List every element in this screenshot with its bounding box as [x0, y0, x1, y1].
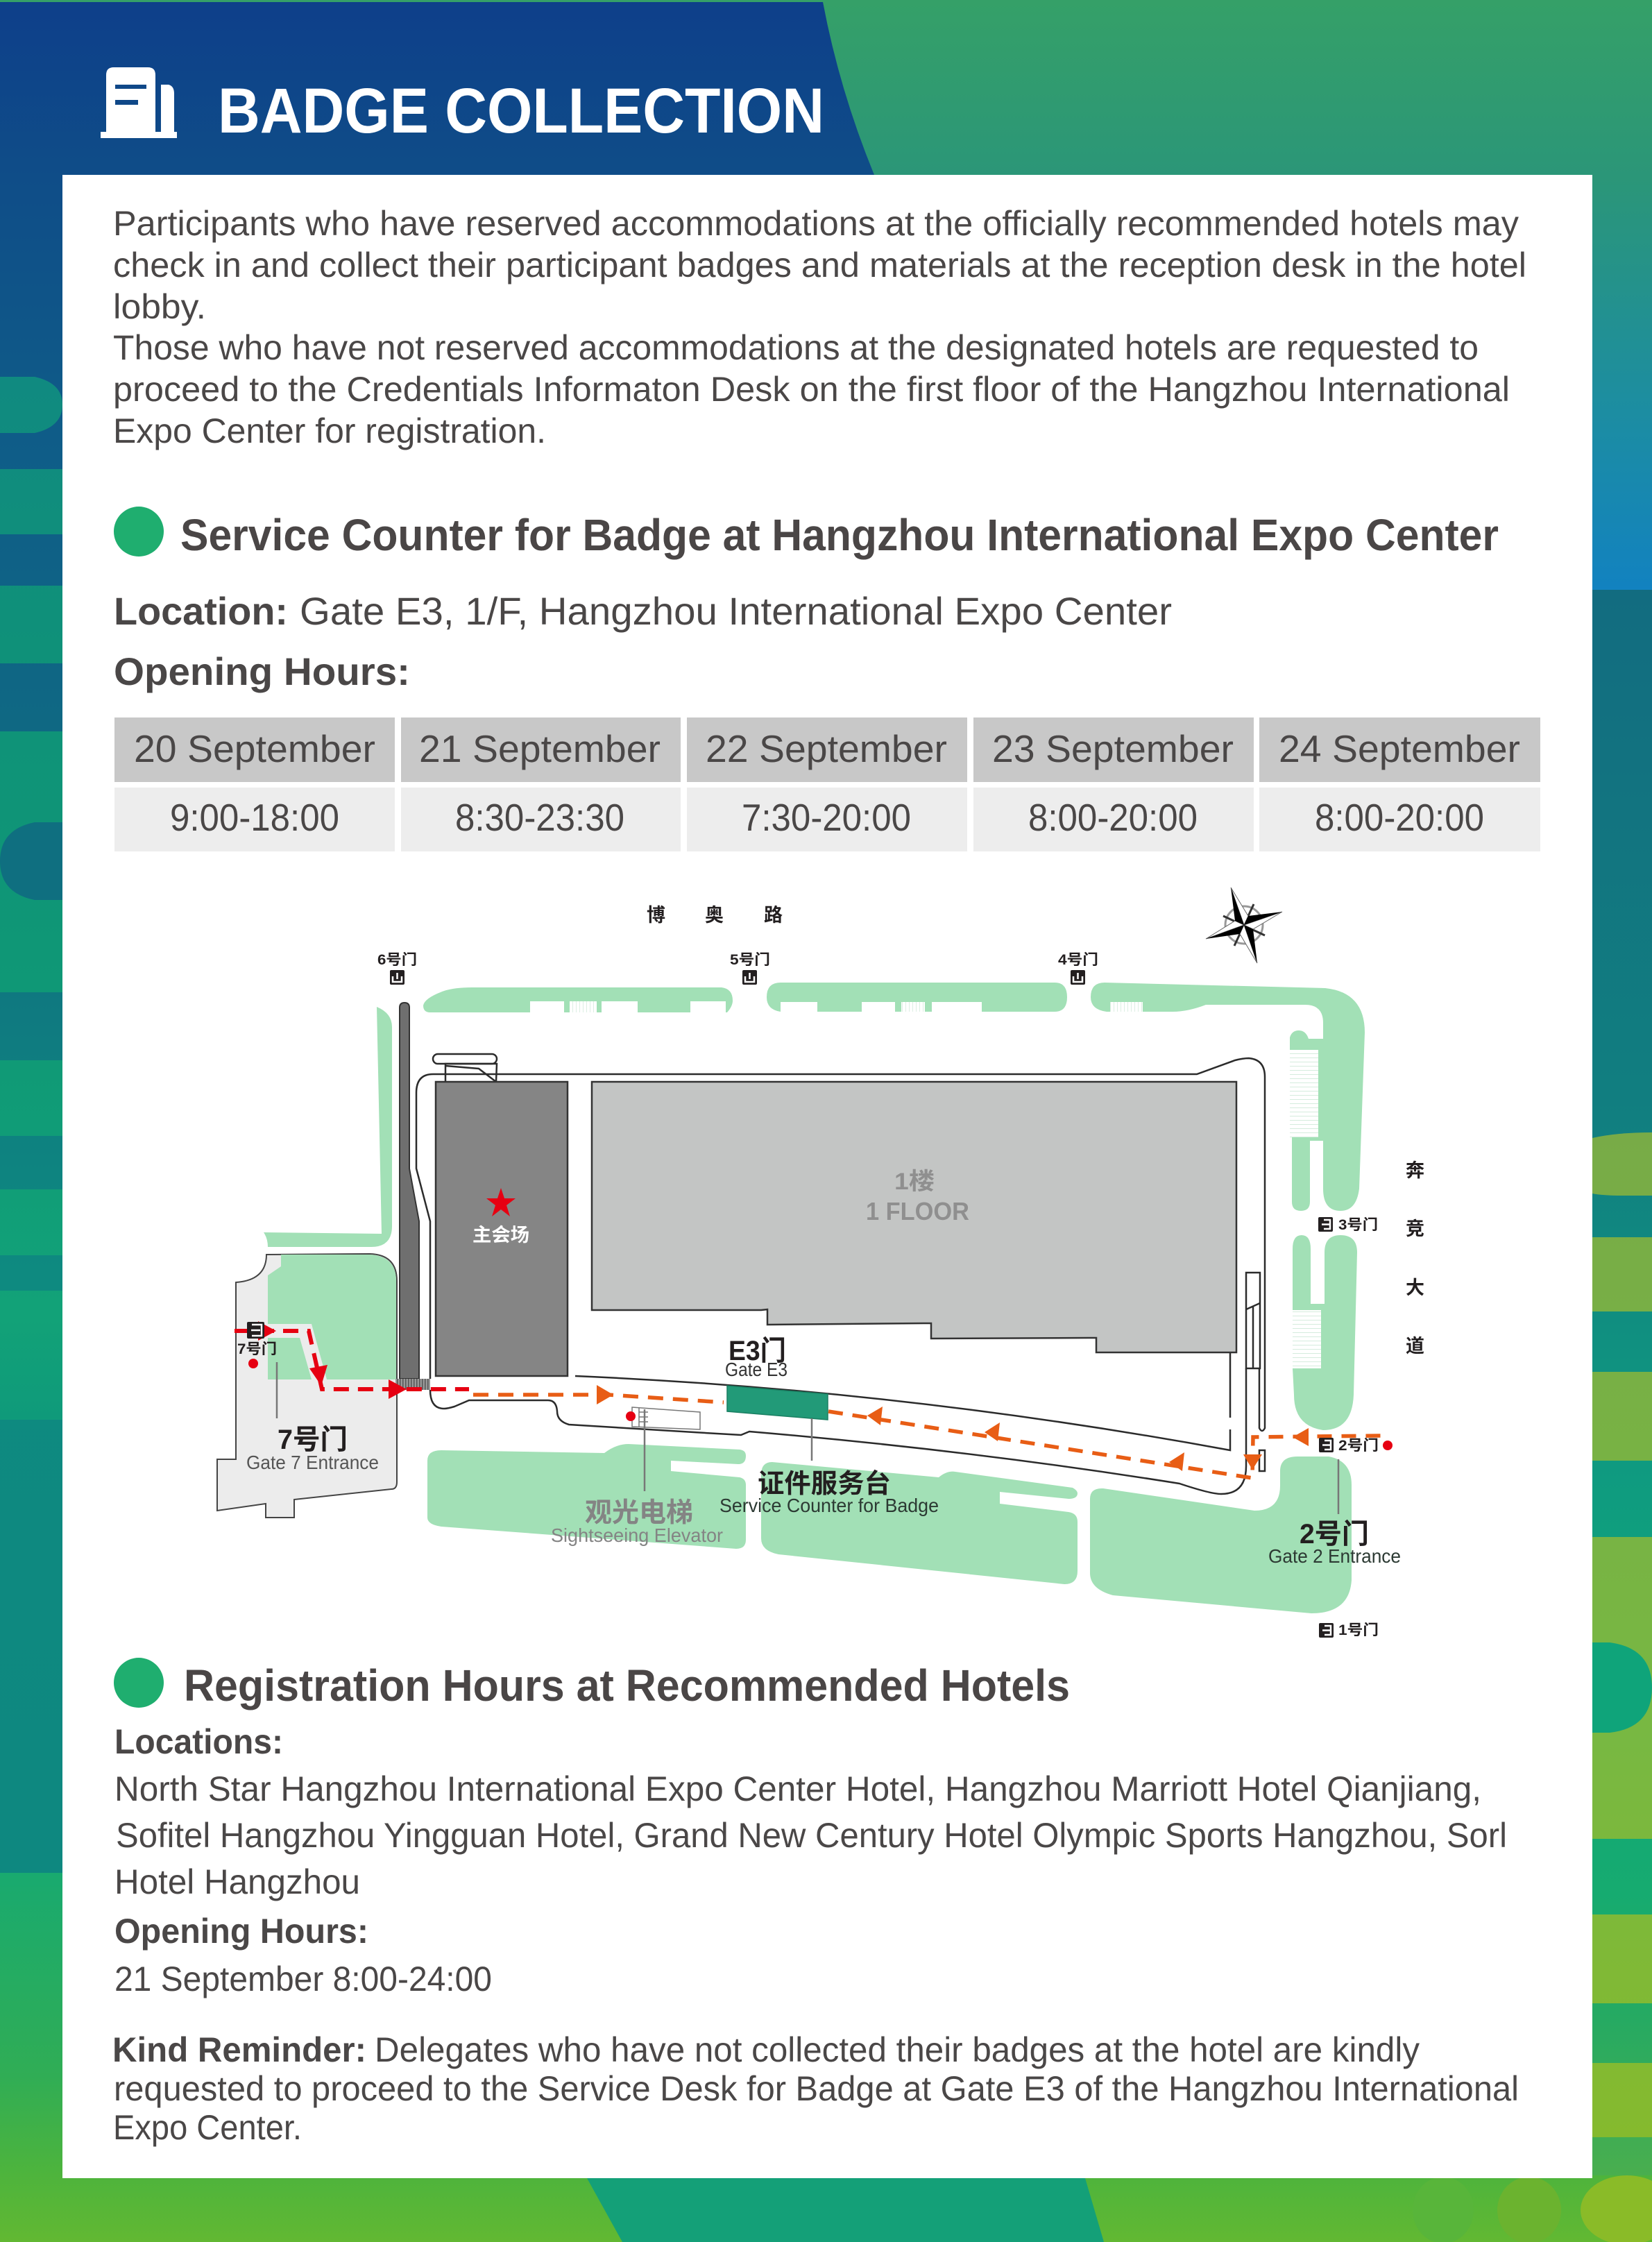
- heading: registration hours: Registration Hours at Recommended Hotels: [184, 1661, 1070, 1710]
- label: gate 7 entrance: Gate 7 Entrance: [246, 1452, 379, 1473]
- table: opening hours: 8:30-23:30: [455, 796, 624, 839]
- text block: introduction: Participants who have reserved accommodations at the officially recommended hotels may: [113, 204, 1519, 243]
- labels: gates and roads: 大: [1406, 1277, 1424, 1298]
- labels: gates and roads: [237, 905, 1424, 1638]
- label: gate 2 entrance: Gate 2 Entrance: [1268, 1545, 1401, 1567]
- text block: hotel locations: North Star Hangzhou International Expo Center Hotel, Hangzhou Marriott Hotel Qianjiang,: [114, 1769, 1481, 1808]
- text block: hotel locations: Hotel Hangzhou: [114, 1862, 360, 1901]
- label: gate E3: [725, 1336, 787, 1380]
- bullet: green dot: [114, 507, 164, 557]
- map: main hall: [436, 1082, 568, 1376]
- labels: gates and roads: 4号门: [1058, 952, 1098, 968]
- text block: kind reminder: requested to proceed to the Service Desk for Badge at Gate E3 of the Hangzhou International: [114, 2069, 1519, 2108]
- icon: compass rose: [1206, 888, 1282, 963]
- icon: red star: [486, 1188, 516, 1216]
- table: opening hours: 20 September: [134, 727, 375, 770]
- text block: kind reminder: Kind Reminder:: [112, 2030, 366, 2069]
- labels: gates and roads: 7号门: [237, 1341, 277, 1357]
- label: sightseeing elevator: 观光电梯: [585, 1498, 693, 1528]
- map: service counter block: [727, 1386, 828, 1420]
- text block: hotel opening hours: 21 September 8:00-24:00: [114, 1960, 492, 1998]
- text block: hotel opening hours: Opening Hours:: [114, 1912, 368, 1951]
- text block: introduction: proceed to the Credentials Informaton Desk on the first floor of the Hangzhou International: [113, 370, 1510, 409]
- labels: gates and roads: 道: [1406, 1336, 1424, 1357]
- map: venue plan: [217, 888, 1424, 1638]
- label: floor: 1 FLOOR: [866, 1197, 969, 1225]
- text block: introduction: check in and collect their participant badges and materials at the reception desk in the hotel: [113, 246, 1526, 285]
- route: red dashed path: [235, 1321, 469, 1399]
- label: gate E3: Gate E3: [725, 1359, 787, 1380]
- label: floor: [866, 1169, 969, 1225]
- text block: introduction: [113, 204, 1526, 450]
- table: opening hours: 8:00-20:00: [1315, 796, 1484, 839]
- map: walkway bar: [395, 1003, 430, 1390]
- label: gate E3: E3门: [729, 1336, 786, 1366]
- title: BADGE COLLECTION: [218, 76, 824, 146]
- labels: gates and roads: 博: [647, 905, 665, 926]
- icons: gate markers: [247, 970, 1334, 1638]
- bullet: green dot: [114, 1658, 164, 1708]
- label: sightseeing elevator: Sightseeing Elevator: [551, 1525, 723, 1546]
- labels: gates and roads: 5号门: [730, 952, 770, 968]
- label: gate 7 entrance: [246, 1425, 379, 1473]
- label: service counter: Service Counter for Badge: [719, 1495, 939, 1516]
- text block: hotel locations: Locations:: [114, 1722, 283, 1761]
- text block: introduction: lobby.: [113, 287, 206, 326]
- text block: introduction: Those who have not reserved accommodations at the designated hotels are requested to: [113, 328, 1479, 367]
- label: sightseeing elevator: [551, 1498, 723, 1546]
- label: main venue: 主会场: [472, 1225, 529, 1246]
- text block: hotel locations: [114, 1722, 1507, 1901]
- label: service counter: 证件服务台: [758, 1470, 891, 1499]
- text block: kind reminder: Delegates who have not collected their badges at the hotel are kindly: [375, 2030, 1420, 2069]
- table: opening hours: 9:00-18:00: [170, 796, 339, 839]
- table: opening hours: 7:30-20:00: [742, 796, 911, 839]
- text block: kind reminder: Expo Center.: [113, 2108, 302, 2147]
- text: opening hours label: Opening Hours:: [114, 649, 410, 693]
- label: floor: 1楼: [894, 1169, 935, 1195]
- labels: gates and roads: 路: [764, 905, 783, 926]
- table: opening hours: 22 September: [706, 727, 947, 770]
- labels: gates and roads: 奔: [1406, 1160, 1424, 1181]
- table: opening hours: 23 September: [992, 727, 1234, 770]
- table: opening hours: [114, 717, 1540, 851]
- table: opening hours: 21 September: [419, 727, 661, 770]
- labels: gates and roads: 2号门: [1338, 1438, 1379, 1454]
- map: gate 7 plaza: [217, 1254, 397, 1518]
- text block: kind reminder: [112, 2030, 1519, 2147]
- text block: hotel opening hours: [114, 1912, 492, 1998]
- header: blue banner: [0, 2, 874, 175]
- label: gate 2 entrance: [1268, 1519, 1401, 1567]
- leader lines: [277, 1362, 1338, 1514]
- text: location: Gate E3, 1/F, Hangzhou International Expo Center: [300, 589, 1172, 633]
- text: location: Location:: [114, 589, 288, 633]
- labels: gates and roads: 奥: [705, 905, 724, 926]
- heading: service counter: Service Counter for Badge at Hangzhou International Expo Center: [180, 510, 1499, 560]
- map: green landscaping: [264, 983, 1365, 1613]
- text block: introduction: Expo Center for registration.: [113, 411, 546, 450]
- table: opening hours: 8:00-20:00: [1028, 796, 1198, 839]
- icon: badge kiosk: [101, 67, 177, 138]
- labels: gates and roads: 3号门: [1338, 1217, 1378, 1233]
- label: gate 2 entrance: 2号门: [1300, 1519, 1369, 1549]
- label: service counter: [719, 1470, 939, 1516]
- labels: gates and roads: 6号门: [377, 952, 417, 968]
- label: gate 7 entrance: 7号门: [278, 1425, 348, 1455]
- table: opening hours: 24 September: [1279, 727, 1520, 770]
- map: elevator box: [632, 1407, 700, 1429]
- map: first floor hall: [592, 1082, 1236, 1352]
- text block: hotel locations: Sofitel Hangzhou Yingguan Hotel, Grand New Century Hotel Olympic Sports Hangzhou, Sorl: [116, 1816, 1507, 1855]
- labels: gates and roads: 竞: [1406, 1218, 1424, 1239]
- labels: gates and roads: 1号门: [1338, 1622, 1379, 1638]
- route: orange dashed path: [473, 1385, 1393, 1478]
- map: building outline: [416, 1054, 1265, 1494]
